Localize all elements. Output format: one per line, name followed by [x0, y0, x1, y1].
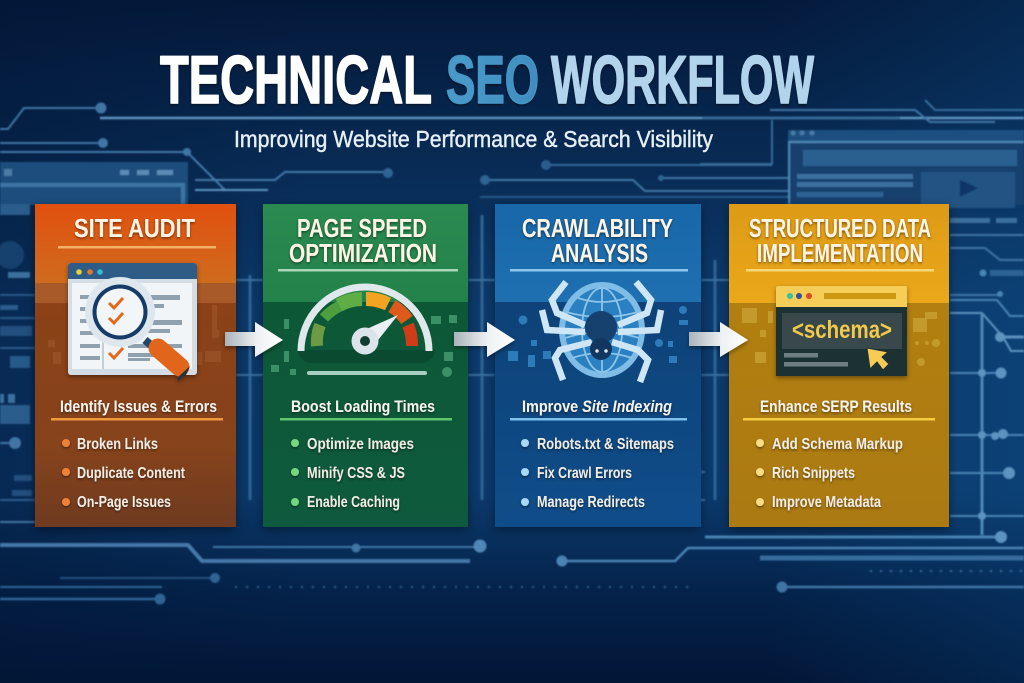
list: speed items: Optimize Images	[307, 436, 414, 453]
list: speed items: Minify CSS & JS	[307, 465, 405, 482]
list: speed items	[291, 436, 414, 511]
list: structured data items	[756, 436, 903, 511]
panel: structured data	[729, 204, 949, 527]
list: audit items	[62, 436, 185, 511]
panel: site audit	[35, 204, 236, 527]
heading: page speed optimization: PAGE SPEED	[297, 213, 427, 243]
list: crawl items	[521, 436, 674, 511]
list: audit items: Broken Links	[77, 436, 158, 453]
heading: structured data implementation	[749, 213, 931, 268]
heading: crawlability analysis: CRAWLABILITY	[522, 213, 673, 243]
heading: site audit: SITE AUDIT	[74, 213, 195, 243]
panel: crawlability	[495, 204, 701, 527]
subheading: boost loading times: Boost Loading Times	[291, 397, 435, 416]
list: audit items: Duplicate Content	[77, 465, 185, 482]
list: crawl items: Robots.txt & Sitemaps	[537, 436, 674, 453]
icon: audit window with magnifier	[68, 263, 197, 381]
list: crawl items: Manage Redirects	[537, 494, 645, 511]
list: crawl items: Fix Crawl Errors	[537, 465, 632, 482]
list: structured data items: Add Schema Markup	[772, 436, 903, 453]
title: TECHNICAL	[160, 42, 432, 118]
heading: structured data implementation: STRUCTURED DATA	[749, 213, 931, 243]
subheading: enhance serp results: Enhance SERP Results	[760, 397, 912, 416]
heading: structured data implementation: IMPLEMENTATION	[757, 238, 923, 268]
icon: spider on globe	[508, 282, 688, 382]
subheading: improve site indexing: Improve Site Indexing	[522, 397, 673, 416]
title: SEO	[446, 42, 539, 118]
arrow: speed to crawl	[454, 322, 515, 357]
heading: crawlability analysis: ANALYSIS	[551, 238, 648, 268]
circuit traces background	[0, 100, 1024, 604]
title: WORKFLOW	[551, 42, 815, 118]
icon: schema browser window: <schema>	[792, 316, 892, 344]
list: structured data items: Improve Metadata	[772, 494, 881, 511]
heading: page speed optimization	[289, 213, 437, 268]
list: structured data items: Rich Snippets	[772, 465, 855, 482]
heading: crawlability analysis	[522, 213, 673, 268]
arrow: crawl to structured data	[689, 322, 748, 357]
list: speed items: Enable Caching	[307, 494, 400, 511]
list: audit items: On-Page Issues	[77, 494, 171, 511]
subtitle: Improving Website Performance & Search Visibility	[234, 126, 713, 152]
title	[160, 42, 815, 118]
heading: page speed optimization: OPTIMIZATION	[289, 238, 437, 268]
arrow: audit to speed	[225, 322, 283, 357]
subheading: identify issues: Identify Issues & Errors	[60, 397, 217, 416]
icon: schema browser window	[742, 286, 940, 376]
icon: speedometer gauge	[271, 287, 457, 377]
panel: page speed	[263, 204, 468, 527]
